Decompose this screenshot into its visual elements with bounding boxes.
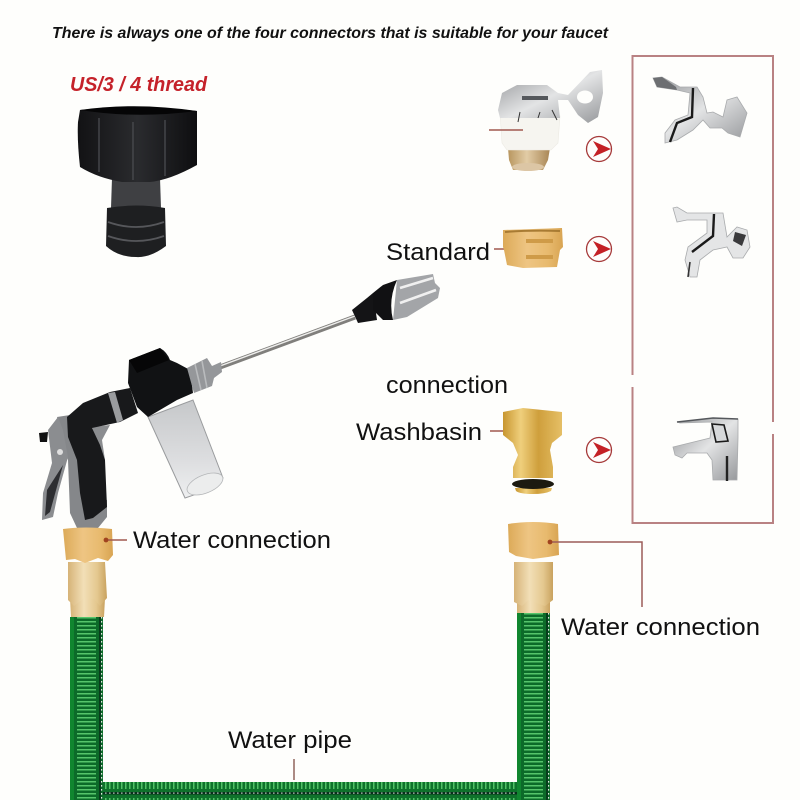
label: washbasin: Washbasin [356, 419, 482, 446]
leader: standard [494, 248, 513, 250]
icon: gold washbasin connector [503, 408, 562, 494]
label: US 3/4 thread: US/3 / 4 thread [70, 74, 208, 96]
leader: left water connection [104, 538, 127, 542]
icon: left brass fitting [63, 528, 113, 617]
gun grey collar [187, 358, 222, 393]
gun bottle [148, 400, 226, 499]
leader: washbasin [490, 430, 517, 432]
icon: right brass fitting [508, 522, 559, 613]
icon: basin faucet [673, 418, 738, 481]
icon: wall faucet 1 [653, 77, 747, 143]
label: water pipe: Water pipe [228, 727, 352, 754]
icon: standard brass connector [503, 228, 563, 268]
icon: spray gun [39, 274, 440, 528]
leader: right water connection [548, 540, 642, 607]
icon: arrow 3 [586, 438, 612, 462]
label: standard: Standard [386, 239, 490, 266]
icon: quick connector with lever [498, 70, 603, 171]
leader: quick connector [489, 129, 523, 131]
icon: black thread connector [78, 106, 197, 257]
gun handle grey [57, 415, 107, 528]
gun spray head [352, 274, 440, 323]
label: connection: connection [386, 372, 508, 399]
icon: wall faucet 2 [673, 207, 750, 277]
gun handle black [67, 388, 138, 520]
label: right water connection: Water connection [561, 614, 760, 641]
hose horizontal [103, 782, 517, 800]
leader: water pipe [293, 759, 295, 780]
title: There is always one of the four connectors that is suitable for your faucet [52, 25, 609, 42]
hose right [517, 613, 550, 800]
frame: faucet panel [632, 56, 773, 523]
label: left water connection: Water connection [133, 527, 331, 554]
gun trigger [39, 417, 68, 520]
icon: arrow 1 [586, 136, 612, 162]
chart: water hose [70, 613, 550, 800]
gun nozzle rod [220, 317, 355, 367]
gun head block [128, 348, 193, 417]
hose left [70, 617, 103, 800]
icon: arrow 2 [586, 236, 612, 262]
